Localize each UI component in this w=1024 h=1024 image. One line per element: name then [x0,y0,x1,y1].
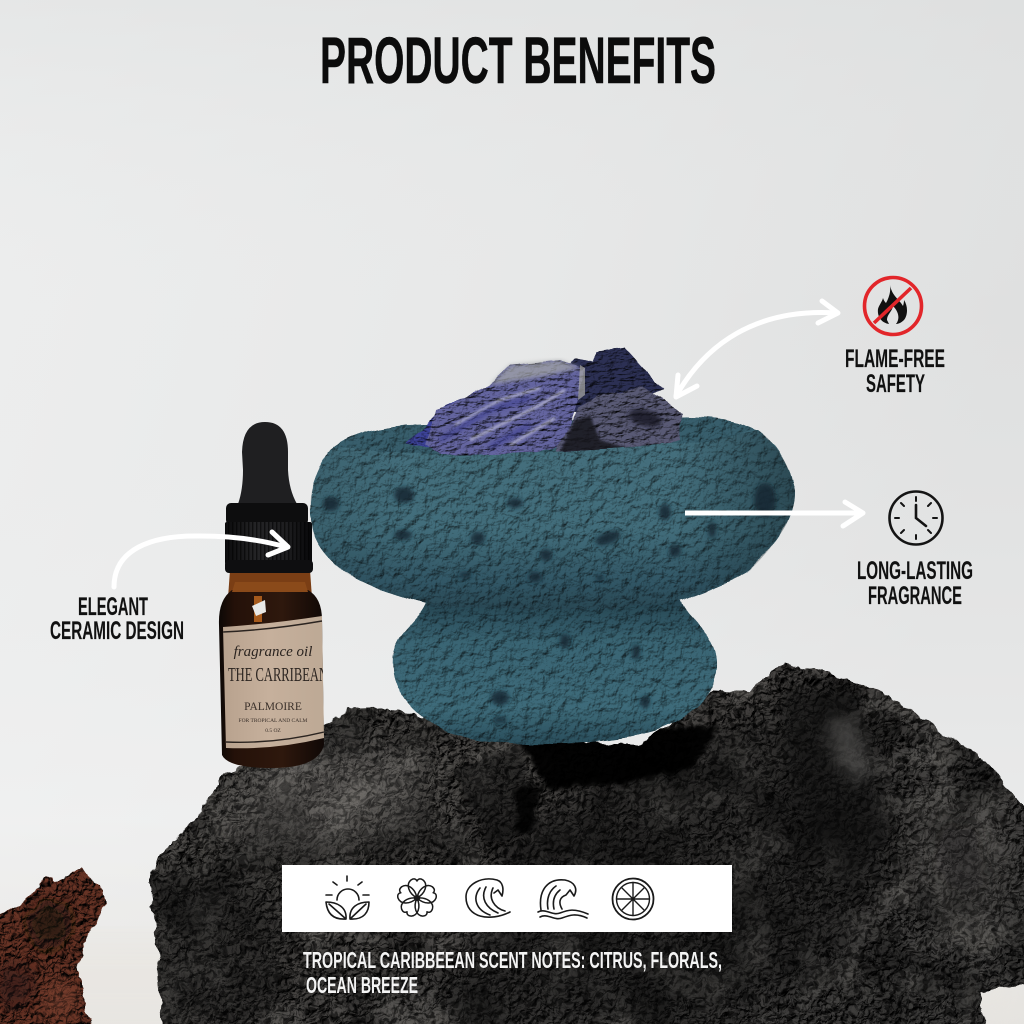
arrow: long-lasting fragrance [685,502,863,526]
label: long-lasting fragrance [857,557,973,610]
label: long-lasting fragrance: FRAGRANCE [868,582,962,610]
dropper bulb [238,422,297,513]
bowl interior [328,417,778,462]
icon: wave with ripples [538,880,588,919]
amber neck [228,570,312,598]
icon: citrus slice [612,878,654,920]
label: elegant ceramic design: CERAMIC DESIGN [50,617,184,645]
icon: flower [396,879,438,919]
scent notes caption [303,947,722,998]
bottle label: FOR TROPICAL AND CALM [239,718,308,724]
bottle label [223,616,328,748]
arrow: flame-free safety [676,301,838,397]
bottle label: 0.5 OZ [265,728,281,734]
lava rock base [140,655,1024,1024]
bottle label: PALMOIRE [244,701,302,713]
icon: no flame [864,278,922,334]
label: elegant ceramic design [50,593,184,645]
glass body [219,590,324,768]
bottle label: THE CARRIBEAN [228,664,328,686]
diffuser bowl [310,348,795,744]
sodalite stones [405,348,682,455]
label: elegant ceramic design: ELEGANT [78,593,148,621]
dropper bottle [219,422,328,768]
icon: clock [890,492,942,544]
label: flame-free safety [845,345,945,398]
arrow: elegant ceramic design [114,532,288,587]
scent notes caption: TROPICAL CARIBBEEAN SCENT NOTES: CITRUS, FLORALS, [303,947,722,973]
scent notes panel [282,865,732,932]
label: flame-free safety: SAFETY [866,370,925,398]
small red rock [0,868,106,1024]
bowl pits [323,483,776,723]
collar and ribbed cap [225,503,313,573]
label: flame-free safety: FLAME-FREE [845,345,945,373]
icon: wave [466,879,510,917]
title: PRODUCT BENEFITS [320,23,716,97]
lower base [393,598,717,744]
icon: sun and leaves [326,876,369,919]
bowl body [310,430,795,609]
bottle label: fragrance oil [234,644,312,660]
scent notes caption: OCEAN BREEZE [306,972,418,998]
